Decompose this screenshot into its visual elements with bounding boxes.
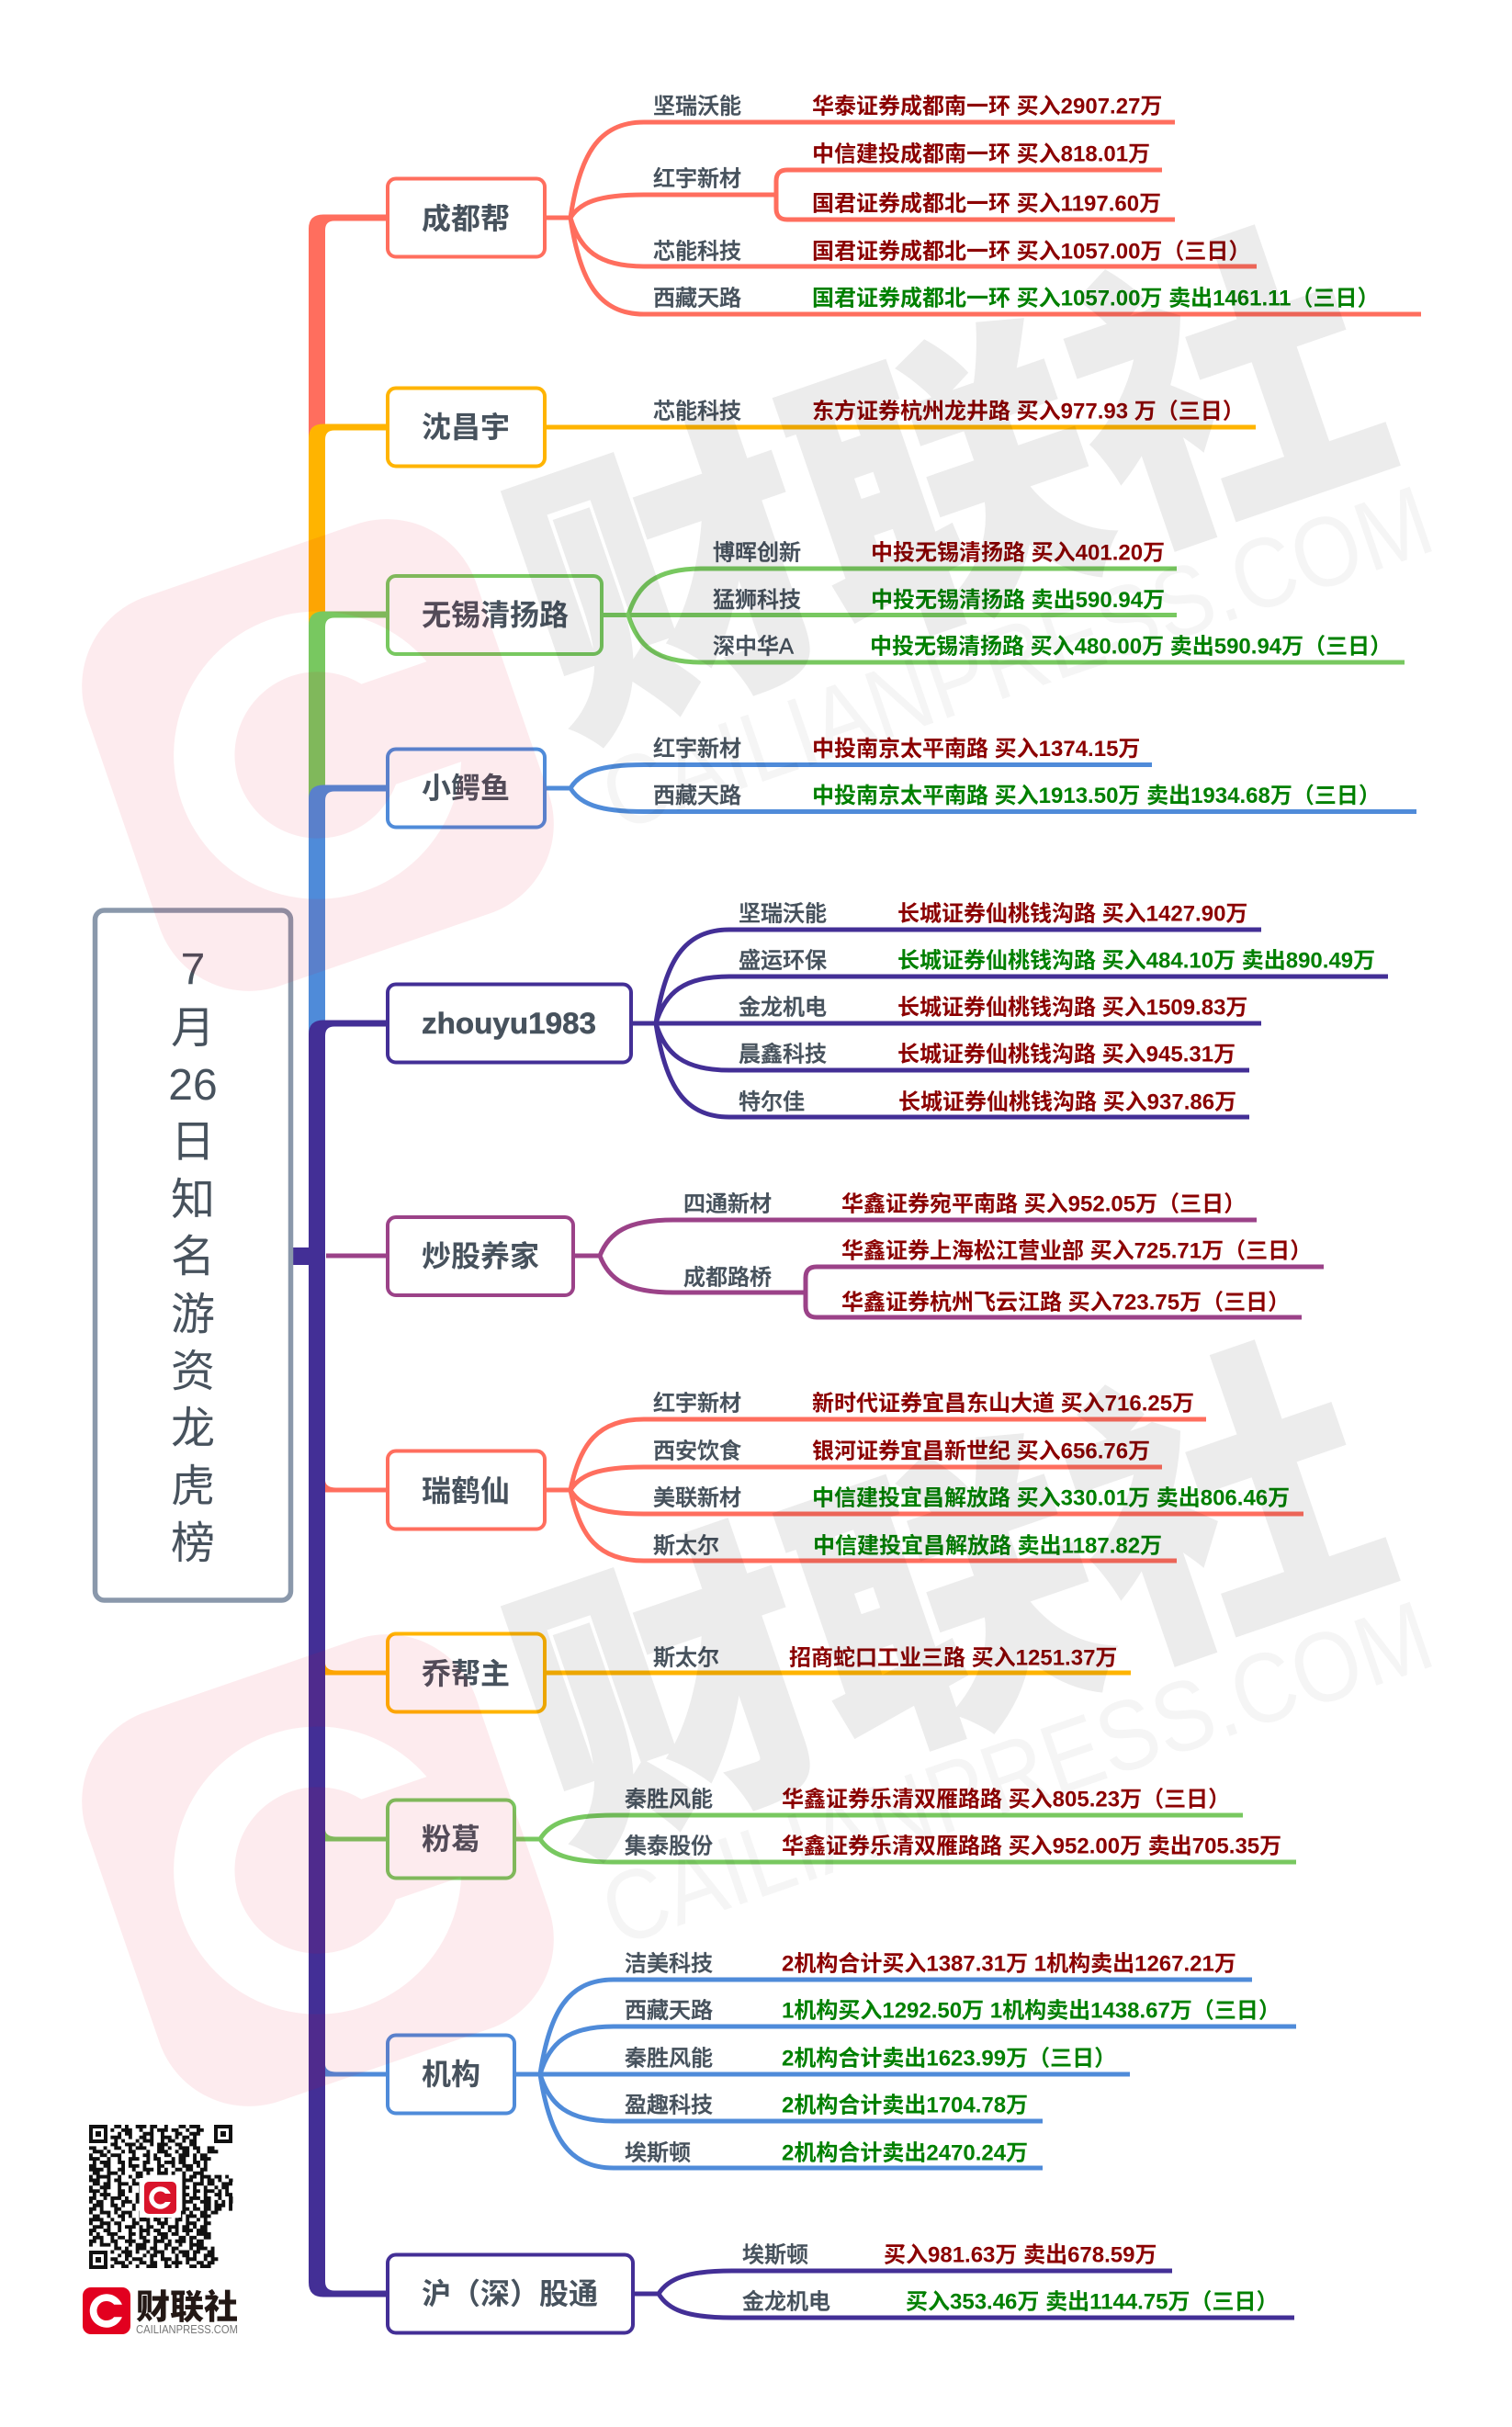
panel: zhouyu1983: 晨鑫科技 — [739, 1042, 827, 1067]
panel: 无锡清扬路: 博晖创新 — [713, 540, 801, 566]
panel: 机构 — [325, 1951, 1296, 2168]
panel: 无锡清扬路: 中投无锡清扬路 买入401.20万 — [871, 540, 1165, 566]
panel: 沪（深）股通 — [388, 2243, 1294, 2333]
panel: 乔帮主: 乔帮主 — [422, 1657, 510, 1690]
panel: 无锡清扬路: 中投无锡清扬路 买入480.00万 卖出590.94万（三日） — [870, 634, 1392, 660]
panel: 沈昌宇: 东方证券杭州龙井路 买入977.93 万（三日） — [812, 399, 1245, 424]
panel: 沪（深）股通: 买入353.46万 卖出1144.75万（三日） — [906, 2289, 1279, 2315]
icon: QR code — [85, 2120, 244, 2275]
panel: 瑞鹤仙: 中信建投宜昌解放路 买入330.01万 卖出806.46万 — [812, 1486, 1290, 1510]
panel: 机构: 2机构合计买入1387.31万 1机构卖出1267.21万 — [782, 1951, 1236, 1977]
panel: 小鳄鱼: 中投南京太平南路 买入1913.50万 卖出1934.68万（三日） — [812, 784, 1381, 808]
panel: zhouyu1983: 金龙机电 — [739, 996, 827, 1020]
panel: 炒股养家 — [326, 1191, 1324, 1317]
panel: title box: 游 — [171, 1291, 215, 1339]
panel: 小鳄鱼: 西藏天路 — [653, 784, 741, 808]
panel: title box: 虎 — [171, 1462, 215, 1511]
panel: 沪（深）股通: 买入981.63万 卖出678.59万 — [884, 2243, 1157, 2267]
panel: 粉葛: 华鑫证券乐清双雁路路 买入805.23万（三日） — [782, 1786, 1230, 1812]
panel: 炒股养家: 成都路桥 — [683, 1266, 772, 1290]
panel: 无锡清扬路: 中投无锡清扬路 卖出590.94万 — [871, 588, 1165, 613]
panel: 机构: 埃斯顿 — [625, 2140, 691, 2166]
panel: 小鳄鱼: 小鳄鱼 — [422, 772, 510, 805]
panel: title box: 日 — [171, 1118, 215, 1167]
panel: 粉葛 — [325, 1786, 1296, 1878]
panel: 炒股养家: 华鑫证券上海松江营业部 买入725.71万（三日） — [841, 1238, 1312, 1264]
panel: zhouyu1983: 长城证券仙桃钱沟路 买入1427.90万 — [897, 900, 1247, 926]
panel: 机构: 洁美科技 — [625, 1951, 713, 1977]
panel: 沪（深）股通: 沪（深）股通 — [422, 2277, 598, 2310]
panel: 成都帮: 国君证券成都北一环 买入1197.60万 — [812, 191, 1161, 217]
panel: title box: 7 — [181, 945, 205, 994]
panel: 小鳄鱼 — [388, 737, 1416, 827]
panel: 瑞鹤仙 — [325, 1391, 1303, 1561]
panel: 沪（深）股通: 埃斯顿 — [742, 2243, 808, 2267]
panel: 成都帮 — [388, 94, 1421, 314]
panel: 成都帮: 国君证券成都北一环 买入1057.00万 卖出1461.11（三日） — [812, 287, 1380, 310]
panel: 乔帮主: 招商蛇口工业三路 买入1251.37万 — [789, 1644, 1117, 1670]
panel: 沈昌宇: 芯能科技 — [653, 399, 741, 424]
panel: title box: 26 — [168, 1061, 218, 1110]
panel: 瑞鹤仙: 中信建投宜昌解放路 卖出1187.82万 — [813, 1534, 1162, 1558]
panel: 机构: 机构 — [422, 2058, 480, 2091]
panel: title box: 榜 — [171, 1519, 215, 1568]
panel: 小鳄鱼: 红宇新材 — [653, 737, 741, 762]
panel: zhouyu1983: 长城证券仙桃钱沟路 买入1509.83万 — [897, 994, 1247, 1020]
panel: title box — [96, 910, 290, 1600]
main trunk: coloured branch spine — [293, 215, 386, 2297]
panel: 沈昌宇 — [388, 388, 1256, 467]
watermark: lower — [54, 1302, 1450, 2132]
panel: 炒股养家: 华鑫证券宛平南路 买入952.05万（三日） — [841, 1191, 1246, 1216]
panel: 瑞鹤仙: 红宇新材 — [653, 1391, 741, 1417]
panel: 炒股养家: 炒股养家 — [422, 1240, 539, 1273]
panel: title box: 名 — [171, 1233, 215, 1281]
panel: 机构: 秦胜风能 — [625, 2047, 713, 2071]
logo: 财联社 brand: 财联社 — [136, 2288, 238, 2326]
panel: 无锡清扬路 — [388, 540, 1405, 662]
panel: 成都帮: 西藏天路 — [653, 287, 741, 310]
panel: 无锡清扬路: 猛狮科技 — [713, 588, 801, 613]
panel: 瑞鹤仙: 斯太尔 — [653, 1534, 719, 1558]
panel: 瑞鹤仙: 银河证券宜昌新世纪 买入656.76万 — [812, 1439, 1150, 1464]
panel: zhouyu1983: 特尔佳 — [739, 1089, 805, 1115]
panel: 成都帮: 成都帮 — [422, 202, 510, 235]
panel: 成都帮: 红宇新材 — [653, 167, 741, 191]
panel: 乔帮主: 斯太尔 — [653, 1646, 719, 1670]
panel: 瑞鹤仙: 新时代证券宜昌东山大道 买入716.25万 — [812, 1391, 1194, 1417]
watermark: upper — [54, 186, 1450, 1017]
panel: 沪（深）股通: 金龙机电 — [742, 2289, 830, 2315]
panel: 机构: 2机构合计卖出2470.24万 — [782, 2140, 1028, 2166]
panel: 瑞鹤仙: 瑞鹤仙 — [422, 1474, 510, 1507]
panel: 粉葛: 粉葛 — [422, 1823, 480, 1856]
panel: 成都帮: 坚瑞沃能 — [653, 94, 741, 119]
watermark: lower: 财联社 — [478, 1303, 1420, 1905]
panel: zhouyu1983: 盛运环保 — [739, 948, 827, 974]
panel: 小鳄鱼: 中投南京太平南路 买入1374.15万 — [812, 737, 1140, 762]
panel: zhouyu1983: zhouyu1983 — [422, 1007, 596, 1040]
panel: 瑞鹤仙: 西安饮食 — [653, 1439, 741, 1464]
panel: zhouyu1983: 坚瑞沃能 — [739, 902, 827, 926]
panel: 粉葛: 集泰股份 — [625, 1834, 713, 1859]
panel: 机构: 1机构买入1292.50万 1机构卖出1438.67万（三日） — [782, 1999, 1281, 2023]
watermark: upper: 财联社 — [478, 187, 1420, 790]
panel: title box: 资 — [171, 1348, 215, 1396]
panel: 沈昌宇: 沈昌宇 — [422, 411, 510, 444]
panel: 炒股养家: 四通新材 — [683, 1192, 772, 1216]
panel: 成都帮: 芯能科技 — [653, 239, 741, 265]
panel: 机构: 西藏天路 — [625, 1999, 713, 2023]
panel: zhouyu1983: 长城证券仙桃钱沟路 买入945.31万 — [897, 1042, 1236, 1067]
panel: title box: 龙 — [171, 1405, 215, 1453]
panel: 乔帮主 — [325, 1633, 1131, 1712]
panel: 无锡清扬路: 无锡清扬路 — [422, 599, 569, 632]
panel: 成都帮: 华泰证券成都南一环 买入2907.27万 — [812, 94, 1162, 119]
panel: 成都帮: 国君证券成都北一环 买入1057.00万（三日） — [812, 239, 1250, 265]
panel: 机构: 盈趣科技 — [625, 2093, 713, 2118]
panel: title box: 月 — [171, 1004, 215, 1053]
panel: 粉葛: 华鑫证券乐清双雁路路 买入952.00万 卖出705.35万 — [782, 1834, 1281, 1859]
panel: 成都帮: 中信建投成都南一环 买入818.01万 — [812, 141, 1150, 167]
panel: zhouyu1983: 长城证券仙桃钱沟路 买入937.86万 — [898, 1089, 1236, 1115]
panel: zhouyu1983: 长城证券仙桃钱沟路 买入484.10万 卖出890.49万 — [897, 948, 1375, 974]
panel: 粉葛: 秦胜风能 — [625, 1788, 713, 1812]
panel: 瑞鹤仙: 美联新材 — [653, 1486, 741, 1510]
panel: title box: 知 — [171, 1176, 215, 1225]
logo: 财联社 brand — [83, 2287, 238, 2336]
panel: 机构: 2机构合计卖出1704.78万 — [782, 2093, 1028, 2118]
panel: 炒股养家: 华鑫证券杭州飞云江路 买入723.75万（三日） — [841, 1290, 1290, 1315]
panel: 机构: 2机构合计卖出1623.99万（三日） — [782, 2047, 1116, 2071]
panel: zhouyu1983 — [388, 900, 1388, 1117]
logo: 财联社 brand: CAILIANPRESS.COM — [136, 2322, 238, 2336]
panel: 无锡清扬路: 深中华A — [713, 634, 794, 660]
